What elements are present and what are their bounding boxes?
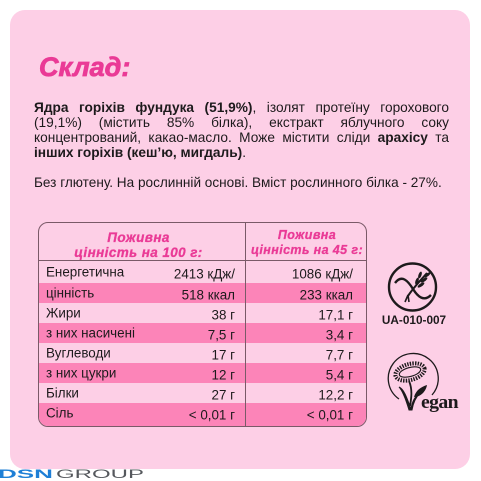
row: energy kcal: 233 ккал [300,287,353,302]
row: energy kcal: цінність [46,286,94,300]
row: sugars [39,363,366,383]
row: carbohydrates: 17 г [212,347,235,362]
row: fat: 38 г [212,307,235,322]
table header: per 45 g: Поживна [278,228,336,242]
row: saturated: 7,5 г [208,327,235,342]
table header: per 45 g: цінність на 45 г: [251,243,363,257]
logo: DSN Group [0,469,145,481]
text block: ingredients: Ядра горіхів фундука (51,9%), ізолят протеїну горохового (19,1%) (містить 85% білка), екстракт яблучного соку концентрований, какао-масло. Може містити сліди арахісу та інших горіхів (кеш’ю, мигдаль). [34,100,449,160]
row: carbohydrates: 7,7 г [326,347,353,362]
column divider [245,223,246,426]
row: energy kJ: 1086 кДж/ [292,266,353,281]
icon: gluten free [382,262,447,327]
icon: gluten free: UA-010-007 [382,313,447,327]
vegan V mark [399,387,420,410]
text block: dietary note: Без глютену. На рослинній основі. Вміст рослинного білка - 27%. [34,175,442,190]
row: energy kJ: Енергетична [46,264,124,280]
table header: per 45 g [251,228,363,257]
logo: DSN Group: GROUP [56,469,145,481]
table header: per 100 g: цінність на 100 г: [74,245,203,260]
table header: per 100 g [74,230,203,260]
row: protein: Білки [46,386,79,400]
row: energy kcal [39,283,366,303]
table header: per 100 g: Поживна [107,230,170,245]
row: energy kJ: 2413 кДж/ [174,266,235,281]
row: fat [46,306,353,322]
row: energy kcal: 518 ккал [182,287,235,302]
row: salt [39,403,366,426]
row: protein [46,386,353,402]
row: sugars: 5,4 г [326,367,353,382]
row: salt: < 0,01 г [189,407,235,422]
nutrition table [38,222,367,427]
title: Склад: [39,52,130,82]
row: salt: < 0,01 г [307,407,353,422]
row: protein: 12,2 г [318,387,353,402]
icon: vegan [388,352,459,413]
row: sugars: 12 г [212,367,235,382]
row: energy kJ [39,260,366,283]
row: saturated [39,323,366,343]
row: saturated: з них насичені [46,326,135,340]
row: fat: 17,1 г [318,307,353,322]
row: carbohydrates: Вуглеводи [46,346,111,360]
row: carbohydrates [46,346,353,362]
row: protein: 27 г [212,387,235,402]
icon: vegan: egan [421,392,459,413]
row: salt: Сіль [46,406,73,420]
row: fat: Жири [46,306,81,320]
row: sugars: з них цукри [46,366,116,380]
row: saturated: 3,4 г [326,327,353,342]
